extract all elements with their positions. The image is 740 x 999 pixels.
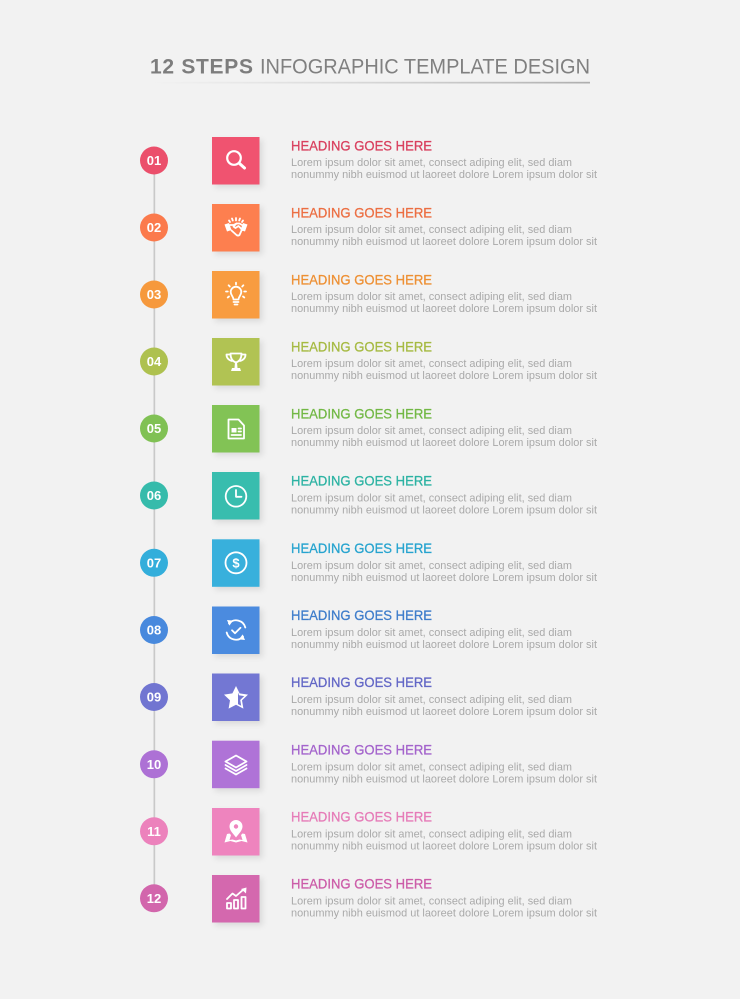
step 01 bbox=[140, 137, 597, 184]
step 03 text: HEADING GOES HERE bbox=[291, 272, 432, 288]
step 12 text: Lorem ipsum dolor sit amet, consect adiping elit, sed diam bbox=[291, 895, 572, 907]
step 07 text: nonummy nibh euismod ut laoreet dolore Lorem ipsum dolor sit bbox=[291, 572, 597, 584]
step 06 bbox=[140, 472, 597, 520]
step 02 number: 02 bbox=[147, 220, 161, 235]
step 11 text bbox=[291, 808, 597, 852]
step 03 number: 03 bbox=[147, 287, 161, 302]
step 08 number bbox=[140, 616, 168, 644]
step 07 icon: dollar coin bbox=[212, 539, 260, 587]
step 11 number: 11 bbox=[147, 824, 161, 839]
step 12 number bbox=[140, 884, 168, 912]
step 06 text: Lorem ipsum dolor sit amet, consect adiping elit, sed diam bbox=[291, 492, 572, 504]
step 10 bbox=[140, 741, 597, 788]
step 10 text: nonummy nibh euismod ut laoreet dolore Lorem ipsum dolor sit bbox=[291, 773, 597, 785]
step 08 text: HEADING GOES HERE bbox=[291, 607, 432, 623]
step 07 text bbox=[291, 540, 597, 584]
step 09 text: HEADING GOES HERE bbox=[291, 674, 432, 690]
step 02 text bbox=[291, 204, 597, 248]
step 08 text bbox=[291, 607, 597, 651]
step 02 text: HEADING GOES HERE bbox=[291, 204, 432, 220]
step 09 text: Lorem ipsum dolor sit amet, consect adiping elit, sed diam bbox=[291, 694, 572, 706]
step 05 text bbox=[291, 406, 597, 449]
step 04 text: Lorem ipsum dolor sit amet, consect adiping elit, sed diam bbox=[291, 358, 572, 370]
step 11 bbox=[140, 808, 597, 856]
step 04 text: HEADING GOES HERE bbox=[291, 338, 432, 354]
step 12 text: nonummy nibh euismod ut laoreet dolore Lorem ipsum dolor sit bbox=[291, 907, 597, 919]
step 09 icon: half star bbox=[212, 674, 260, 721]
step 02 number bbox=[140, 214, 168, 242]
title: 12 STEPS bbox=[150, 56, 253, 78]
title: INFOGRAPHIC TEMPLATE DESIGN bbox=[260, 56, 590, 78]
step 10 number: 10 bbox=[147, 757, 161, 772]
step 01 text: HEADING GOES HERE bbox=[291, 138, 432, 154]
step 10 number bbox=[140, 750, 168, 778]
step 09 bbox=[140, 674, 597, 721]
step 01 text: nonummy nibh euismod ut laoreet dolore Lorem ipsum dolor sit bbox=[291, 169, 597, 181]
timeline line bbox=[154, 160, 155, 898]
step 08 text: Lorem ipsum dolor sit amet, consect adiping elit, sed diam bbox=[291, 627, 572, 639]
step 06 number bbox=[140, 482, 168, 510]
step 11 text: Lorem ipsum dolor sit amet, consect adiping elit, sed diam bbox=[291, 828, 572, 840]
step 04 icon: trophy bbox=[212, 338, 260, 386]
step 06 icon: clock bbox=[212, 472, 260, 520]
step 05 text: HEADING GOES HERE bbox=[291, 406, 432, 422]
step 05 bbox=[140, 405, 597, 452]
step 06 text: HEADING GOES HERE bbox=[291, 472, 432, 488]
step 11 icon: map pin bbox=[212, 808, 260, 856]
step 03 number bbox=[140, 280, 168, 308]
step 01 icon: magnifier bbox=[212, 137, 260, 184]
step 01 number bbox=[140, 146, 168, 174]
step 07 text: HEADING GOES HERE bbox=[291, 540, 432, 556]
step 06 text: nonummy nibh euismod ut laoreet dolore Lorem ipsum dolor sit bbox=[291, 504, 597, 516]
step 11 text: nonummy nibh euismod ut laoreet dolore Lorem ipsum dolor sit bbox=[291, 840, 597, 852]
step 03 text bbox=[291, 272, 597, 315]
step 06 number: 06 bbox=[147, 488, 161, 503]
step 10 icon: layers bbox=[212, 741, 260, 788]
step 11 text: HEADING GOES HERE bbox=[291, 808, 432, 824]
step 07 icon: dollar coin: $ bbox=[232, 556, 240, 570]
step 02 icon: handshake bbox=[212, 204, 260, 252]
step 03 text: nonummy nibh euismod ut laoreet dolore Lorem ipsum dolor sit bbox=[291, 303, 597, 315]
step 07 number bbox=[140, 549, 168, 577]
step 09 text bbox=[291, 674, 597, 718]
step 03 icon: light bulb bbox=[212, 271, 260, 318]
step 12 number: 12 bbox=[147, 891, 161, 906]
step 04 number bbox=[140, 348, 168, 376]
step 04 text: nonummy nibh euismod ut laoreet dolore Lorem ipsum dolor sit bbox=[291, 370, 597, 382]
step 10 text bbox=[291, 742, 597, 785]
step 04 text bbox=[291, 338, 597, 382]
step 12 text bbox=[291, 876, 597, 919]
step 11 number bbox=[140, 817, 168, 845]
step 02 text: nonummy nibh euismod ut laoreet dolore Lorem ipsum dolor sit bbox=[291, 236, 597, 248]
step 02 text: Lorem ipsum dolor sit amet, consect adiping elit, sed diam bbox=[291, 224, 572, 236]
step 12 bbox=[140, 875, 597, 922]
step 04 bbox=[140, 338, 597, 386]
step 08 bbox=[140, 606, 597, 654]
step 07 text: Lorem ipsum dolor sit amet, consect adiping elit, sed diam bbox=[291, 560, 572, 572]
step 09 number bbox=[140, 683, 168, 711]
step 08 text: nonummy nibh euismod ut laoreet dolore Lorem ipsum dolor sit bbox=[291, 639, 597, 651]
step 08 number: 08 bbox=[147, 622, 161, 638]
step 12 icon: growth chart bbox=[212, 875, 260, 922]
title underline bbox=[150, 82, 590, 84]
step 05 number bbox=[140, 414, 168, 442]
step 01 text bbox=[291, 138, 597, 181]
step 08 icon: refresh check bbox=[212, 606, 260, 654]
step 07 bbox=[140, 539, 597, 587]
step 04 number: 04 bbox=[147, 354, 162, 369]
step 06 text bbox=[291, 472, 597, 516]
step 10 text: Lorem ipsum dolor sit amet, consect adiping elit, sed diam bbox=[291, 761, 572, 773]
step 05 text: nonummy nibh euismod ut laoreet dolore Lorem ipsum dolor sit bbox=[291, 437, 597, 449]
step 05 number: 05 bbox=[147, 421, 161, 436]
step 01 text: Lorem ipsum dolor sit amet, consect adiping elit, sed diam bbox=[291, 157, 572, 169]
step 01 number: 01 bbox=[147, 153, 161, 168]
step 05 text: Lorem ipsum dolor sit amet, consect adiping elit, sed diam bbox=[291, 425, 572, 437]
step 09 number: 09 bbox=[147, 690, 161, 704]
step 03 text: Lorem ipsum dolor sit amet, consect adiping elit, sed diam bbox=[291, 291, 572, 303]
step 02 bbox=[140, 204, 597, 252]
step 05 icon: document bbox=[212, 405, 260, 452]
step 09 text: nonummy nibh euismod ut laoreet dolore Lorem ipsum dolor sit bbox=[291, 706, 597, 718]
step 07 number: 07 bbox=[147, 555, 161, 570]
step 12 text: HEADING GOES HERE bbox=[291, 876, 432, 892]
step 10 text: HEADING GOES HERE bbox=[291, 742, 432, 758]
step 03 bbox=[140, 271, 597, 318]
